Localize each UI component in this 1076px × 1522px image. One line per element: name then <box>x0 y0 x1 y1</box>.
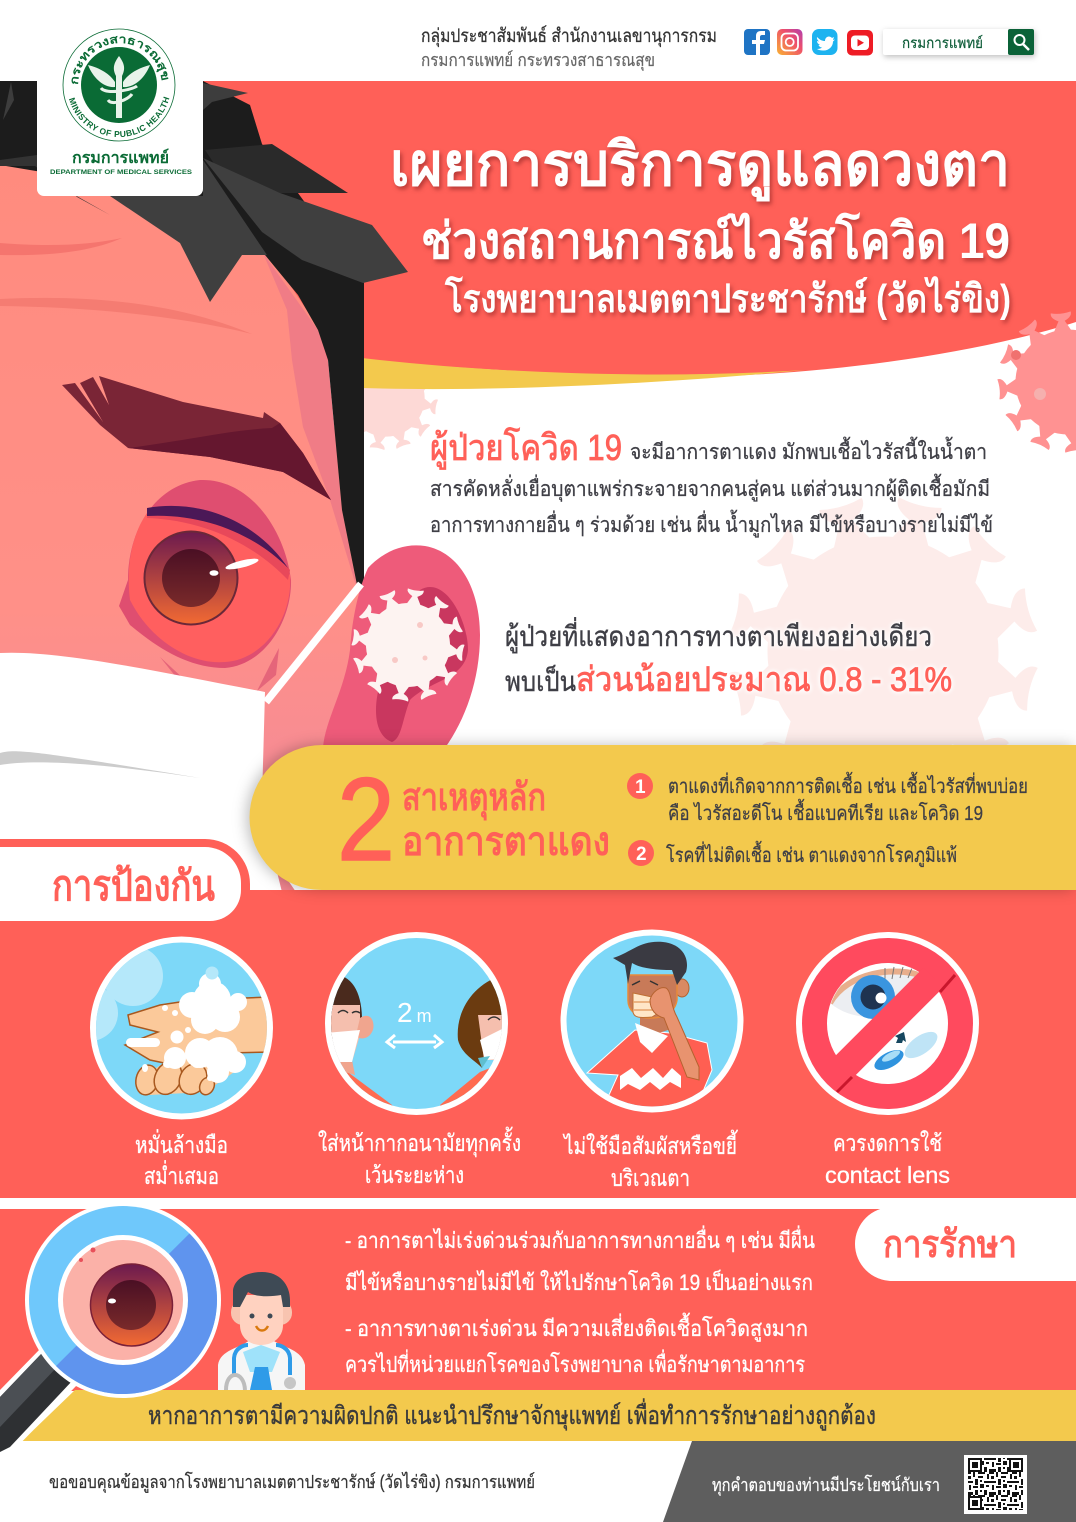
prevention captions: contact lens <box>825 1162 950 1188</box>
red eye <box>119 480 291 691</box>
cause 1 <box>627 772 1028 825</box>
footer panel <box>663 1441 1076 1522</box>
big number 2: 2 <box>337 754 395 886</box>
doctor illustration <box>218 1272 305 1390</box>
treatment heading tab <box>855 1207 1076 1281</box>
prevention captions: ไม่ใช้มือสัมผัสหรือขยี้ <box>562 1130 738 1159</box>
logo card: DEPARTMENT OF MEDICAL SERVICES <box>50 169 193 176</box>
intro paragraph: อาการทางกายอื่น ๆ ร่วมด้วย เช่น ผื่น น้ำมูกไหล มีไข้หรือบางรายไม่มีไข้ <box>430 510 993 538</box>
cause 2: 2 <box>636 844 647 865</box>
magnifier with red eye <box>0 1206 221 1452</box>
cause 2: โรคที่ไม่ติดเชื้อ เช่น ตาแดงจากโรคภูมิแพ้ <box>666 841 957 868</box>
callout: eye-only share: ส่วนน้อยประมาณ 0.8 - 31% <box>576 661 952 699</box>
eyebrow <box>62 376 331 500</box>
cause 1: 1 <box>635 777 646 798</box>
icon: instagram <box>777 29 802 55</box>
ministry seal: MINISTRY OF PUBLIC HEALTH <box>69 96 170 137</box>
icon: facebook <box>744 29 770 55</box>
advice banner <box>22 1390 1076 1441</box>
header text: กรมการแพทย์ กระทรวงสาธารณสุข <box>421 50 655 71</box>
intro paragraph: ผู้ป่วยโควิด 19 <box>430 427 622 470</box>
prevention captions: สม่ำเสมอ <box>144 1160 219 1189</box>
icon: mask and distance <box>325 932 510 1115</box>
department name: กรมการแพทย์ <box>72 148 169 167</box>
prohibition bar <box>832 968 955 1092</box>
header text: กลุ่มประชาสัมพันธ์ สำนักงานเลขานุการกรม <box>421 25 717 48</box>
title <box>390 131 1011 321</box>
QR code <box>964 1455 1027 1514</box>
treatment text <box>345 1225 815 1377</box>
prevention captions <box>135 1127 950 1191</box>
right person <box>440 980 502 1106</box>
treatment text: - อาการทางตาเร่งด่วน มีความเสี่ยงติดเชื้อโควิดสูงมาก <box>345 1313 808 1342</box>
virus decoration top right <box>991 305 1076 459</box>
panel: treatment background <box>0 1209 1076 1391</box>
icon: youtube <box>847 30 873 56</box>
ear with virus <box>323 545 480 748</box>
ministry seal: กระทรวงสาธารณสุข <box>72 36 168 84</box>
footer credit: ขอขอบคุณข้อมูลจากโรงพยาบาลเมตตาประชารักษ์ (วัดไร่ขิง) กรมการแพทย์ <box>49 1471 535 1493</box>
callout: eye-only share: ผู้ป่วยที่แสดงอาการทางตาเพียงอย่างเดียว <box>505 617 932 654</box>
header banner background <box>0 81 1076 389</box>
footer panel: ทุกคำตอบของท่านมีประโยชน์กับเรา <box>712 1474 940 1496</box>
prevention captions: ใส่หน้ากากอนามัยทุกครั้ง <box>318 1127 521 1157</box>
social icons <box>744 29 873 56</box>
cause 1: คือ ไวรัสอะดีโน เชื้อแบคทีเรีย และโควิด 19 <box>668 799 983 825</box>
prevention captions: หมั่นล้างมือ <box>135 1129 228 1158</box>
intro paragraph: สารคัดหลั่งเยื่อบุตาแพร่กระจายจากคนสู่คน แต่ส่วนมากผู้ติดเชื้อมักมี <box>430 474 990 502</box>
header text <box>421 25 717 71</box>
ministry seal <box>62 28 176 142</box>
panel: two main causes <box>249 745 1076 890</box>
title: ช่วงสถานการณ์ไวรัสโควิด 19 <box>421 211 1010 269</box>
intro paragraph: จะมีอาการตาแดง มักพบเชื้อไวรัสนี้ในน้ำตา <box>630 437 987 464</box>
illustration: face with red eye, mask and ear <box>0 81 480 892</box>
treatment text: ควรไปที่หน่วยแยกโรคของโรงพยาบาล เพื่อรักษาตามอาการ <box>345 1349 805 1377</box>
advice banner: หากอาการตามีความผิดปกติ แนะนำปรึกษาจักษุแพทย์ เพื่อทำการรักษาอย่างถูกต้อง <box>148 1398 876 1431</box>
treatment heading tab: การรักษา <box>883 1224 1017 1266</box>
icon: twitter <box>812 29 838 55</box>
prevention heading tab: การป้องกัน <box>52 862 215 909</box>
causes heading: อาการตาแดง <box>402 820 610 864</box>
contact lens <box>871 1027 942 1074</box>
causes heading <box>402 777 610 864</box>
panel: prevention background <box>0 890 1076 1198</box>
logo card <box>37 28 203 196</box>
search box: กรมการแพทย์ <box>902 35 983 52</box>
treatment text: - อาการตาไม่เร่งด่วนร่วมกับอาการทางกายอื่น ๆ เช่น มีผื่น <box>345 1225 815 1253</box>
icon: hand washing <box>90 936 273 1120</box>
prevention heading tab <box>0 839 250 921</box>
icon: no contact lens <box>796 932 979 1115</box>
cause 2 <box>628 840 957 868</box>
intro paragraph <box>430 427 993 538</box>
surgical mask <box>0 584 361 892</box>
background virus decorations <box>326 338 1070 839</box>
icon: do not touch eyes <box>560 930 744 1115</box>
left person <box>331 977 393 1106</box>
search box <box>883 29 1034 55</box>
prevention captions: ควรงดการใช้ <box>833 1130 942 1156</box>
callout: eye-only share <box>505 617 952 699</box>
distance label: 2m <box>397 997 432 1028</box>
causes heading: สาเหตุหลัก <box>402 777 546 821</box>
treatment text: มีไข้หรือบางรายไม่มีไข้ ให้ไปรักษาโควิด 19 เป็นอย่างแรก <box>345 1268 813 1295</box>
title: เผยการบริการดูแลดวงตา <box>390 131 1010 202</box>
prevention captions: บริเวณตา <box>611 1165 690 1191</box>
prevention captions: เว้นระยะห่าง <box>365 1162 464 1188</box>
distance arrow <box>387 1035 442 1048</box>
callout: eye-only share: พบเป็น <box>505 664 576 697</box>
